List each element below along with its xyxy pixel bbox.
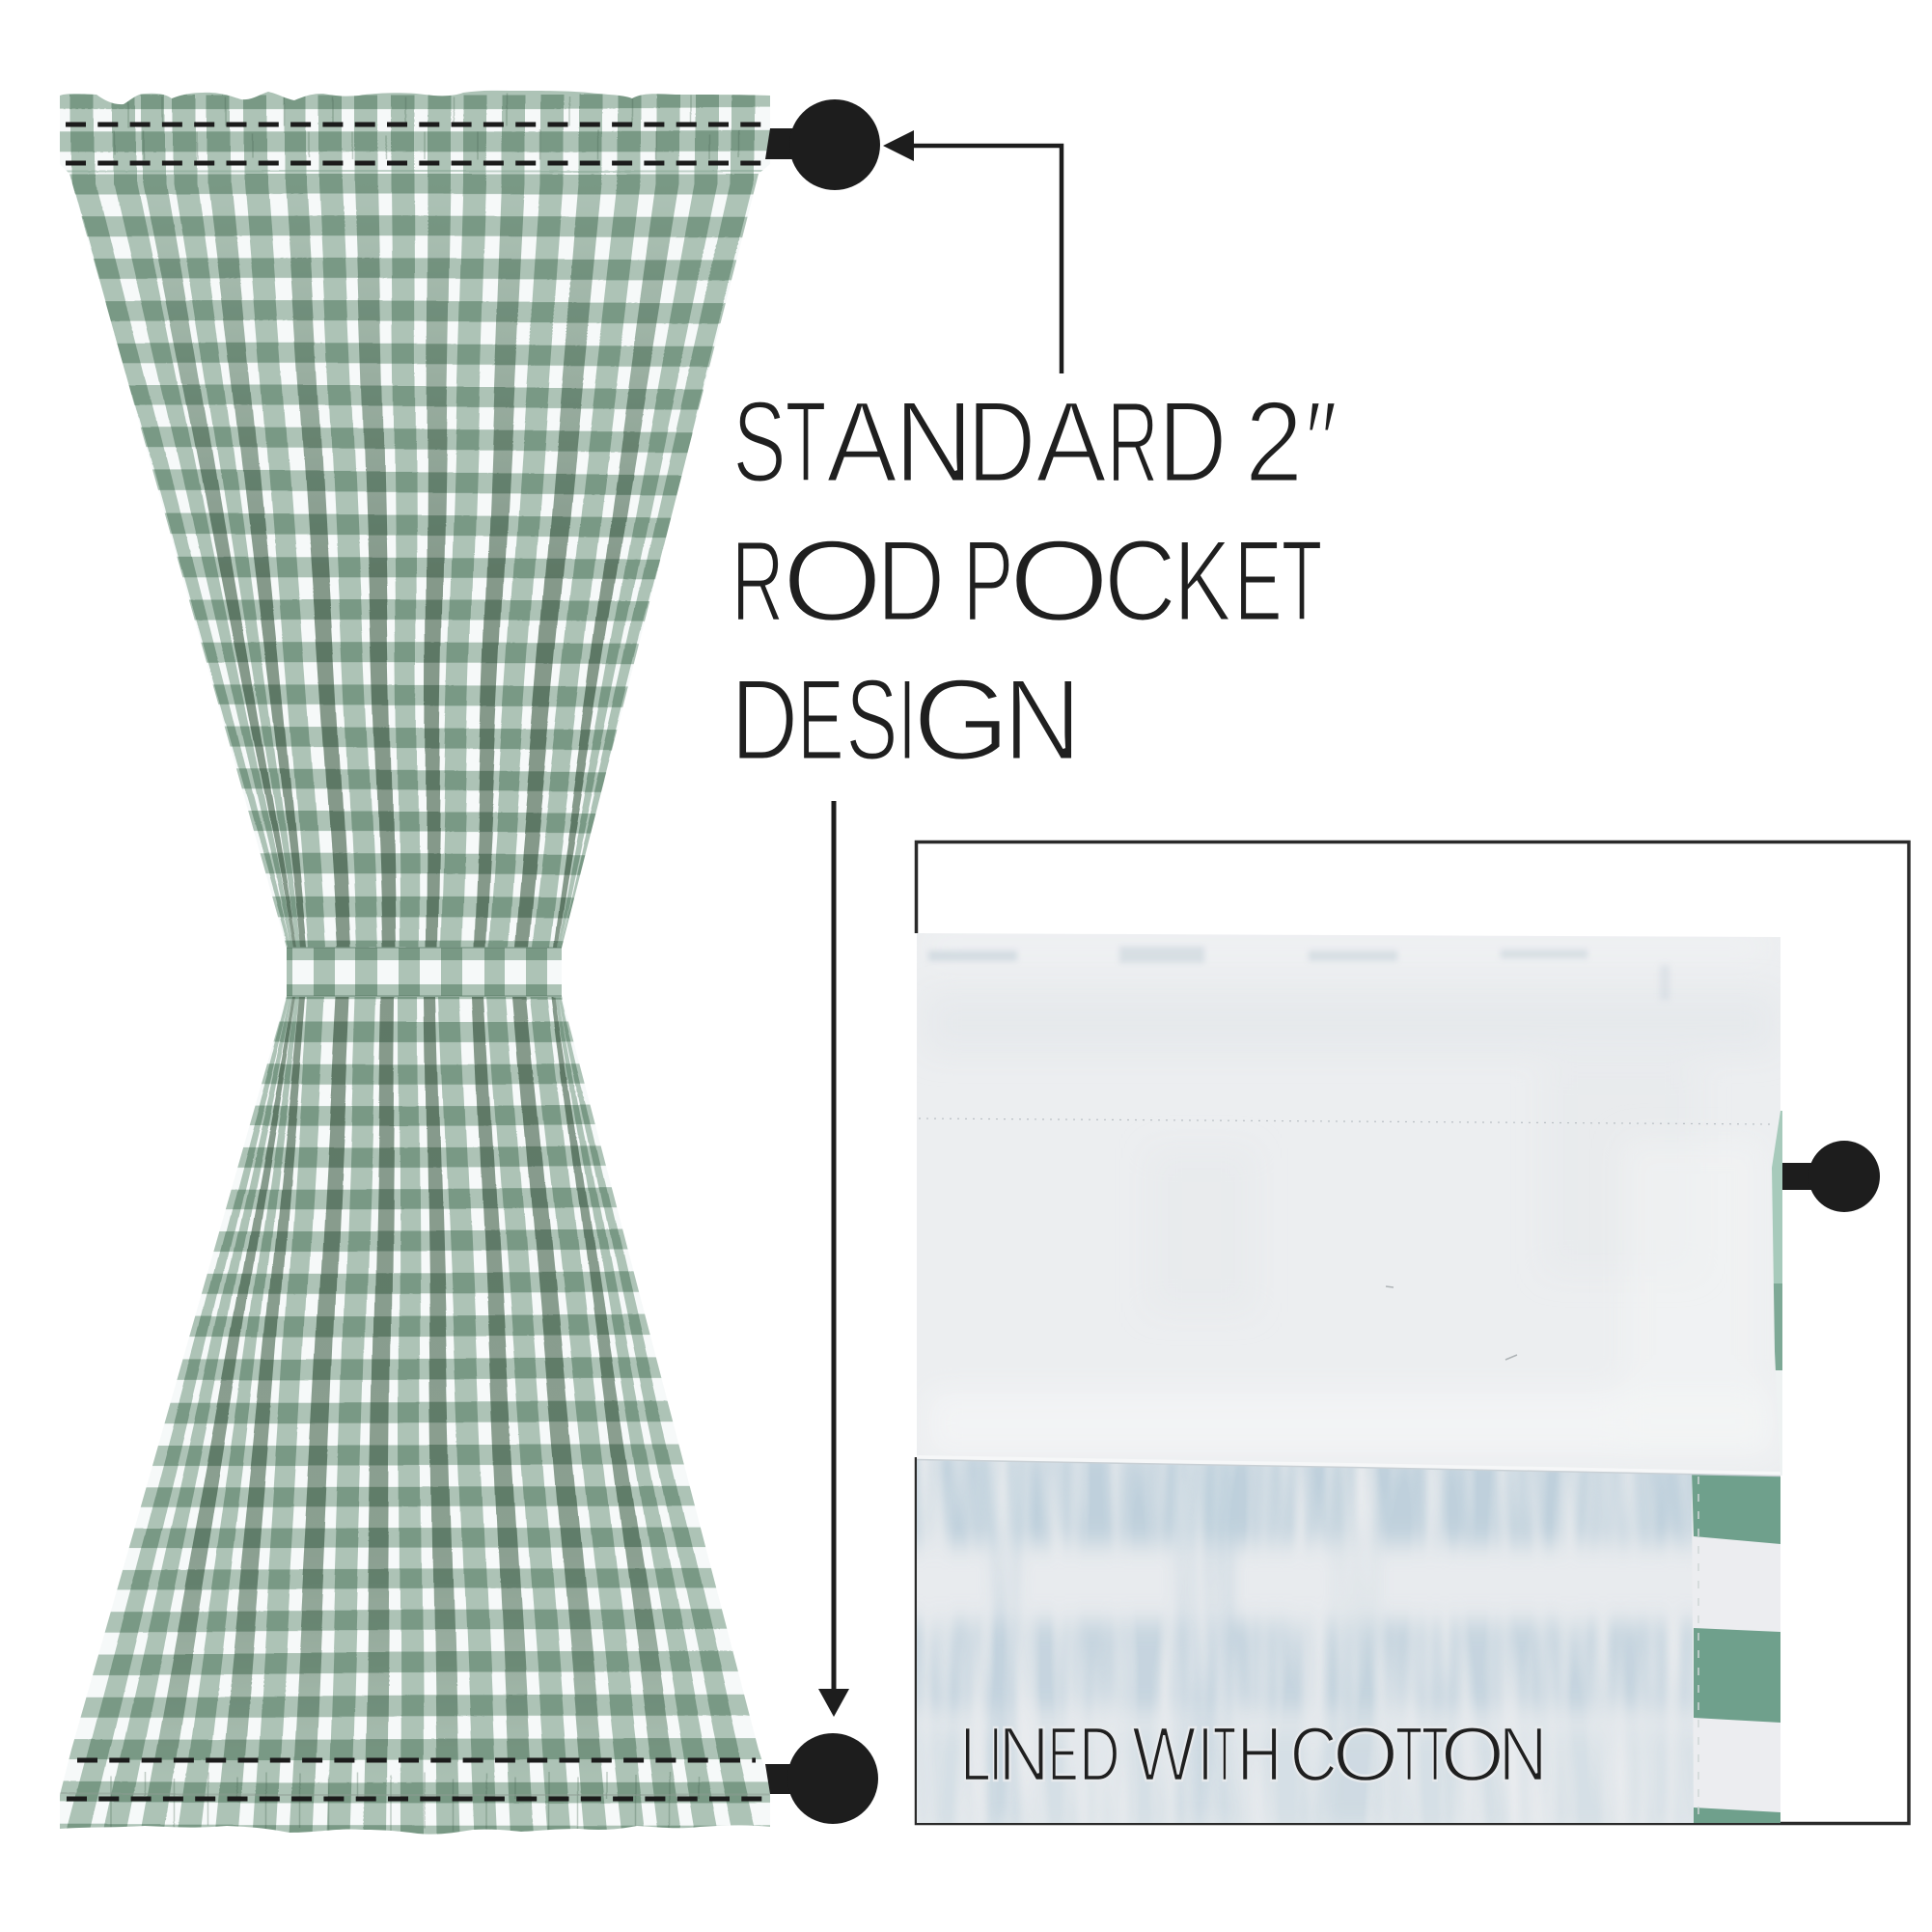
arrow: callout pointing to top rod	[883, 130, 1062, 373]
heading: standard rod pocket design	[731, 377, 1338, 785]
lining fabric lower section	[897, 1448, 1780, 1834]
label: lined with cotton: W	[1132, 1711, 1197, 1797]
label: lined with cotton: N	[998, 1711, 1050, 1797]
heading: standard rod pocket design: G	[913, 655, 1010, 785]
heading: standard rod pocket design: R	[731, 516, 785, 646]
heading: standard rod pocket design: A	[1035, 377, 1107, 507]
heading: standard rod pocket design: S	[845, 655, 898, 785]
curtain upper section above tieback	[39, 68, 791, 965]
label: lined with cotton: I	[1198, 1711, 1213, 1797]
stitch lines: top rod pocket	[66, 124, 762, 163]
heading: standard rod pocket design: E	[1234, 516, 1283, 646]
heading: standard rod pocket design: N	[894, 377, 974, 507]
label: lined with cotton: E	[1048, 1711, 1078, 1797]
heading: standard rod pocket design: P	[963, 516, 1013, 646]
icon: small curtain rod	[1782, 1141, 1880, 1212]
heading: standard rod pocket design: T	[1282, 516, 1322, 646]
heading: standard rod pocket design: C	[1104, 516, 1176, 646]
heading: standard rod pocket design: K	[1173, 516, 1231, 646]
heading: standard rod pocket design: O	[1008, 516, 1110, 646]
heading: standard rod pocket design: E	[797, 655, 844, 785]
icon: top curtain rod	[765, 99, 880, 190]
panel: lined with cotton detail	[897, 842, 1909, 1834]
heading: standard rod pocket design: D	[731, 655, 798, 785]
heading: standard rod pocket design: 2	[1245, 377, 1303, 507]
curtain panel: gingham door panel	[39, 68, 791, 1843]
label: lined with cotton: C	[1290, 1711, 1338, 1797]
label: lined with cotton: I	[989, 1711, 1002, 1797]
label: lined with cotton: D	[1079, 1711, 1120, 1797]
heading: standard rod pocket design: D	[876, 516, 945, 646]
label: lined with cotton: O	[1333, 1711, 1398, 1797]
heading: standard rod pocket design: T	[786, 377, 826, 507]
icon: bottom curtain rod	[765, 1733, 878, 1824]
label: lined with cotton: T	[1213, 1711, 1236, 1797]
heading: standard rod pocket design: I	[897, 655, 917, 785]
heading: standard rod pocket design: ″	[1305, 377, 1338, 507]
heading: standard rod pocket design: D	[967, 377, 1035, 507]
panel frame	[917, 842, 1909, 1824]
heading: standard rod pocket design: A	[826, 377, 897, 507]
stitch lines: bottom rod pocket	[67, 1760, 762, 1799]
curtain lower section below tieback	[39, 984, 791, 1843]
label: lined with cotton: H	[1237, 1711, 1282, 1797]
label: lined with cotton: T	[1421, 1711, 1449, 1797]
heading: standard rod pocket design: D	[1158, 377, 1227, 507]
label: lined with cotton: T	[1395, 1711, 1422, 1797]
heading: standard rod pocket design: O	[782, 516, 883, 646]
heading: standard rod pocket design: S	[732, 377, 787, 507]
fold seam	[917, 1459, 1780, 1477]
label: lined with cotton: O	[1441, 1711, 1504, 1797]
tieback band	[287, 948, 562, 996]
arrow: pointing down to bottom rod	[818, 801, 849, 1717]
green fabric sliver behind fold	[1770, 1111, 1782, 1476]
label: lined with cotton: L	[961, 1711, 991, 1797]
label: lined with cotton: N	[1499, 1711, 1547, 1797]
heading: standard rod pocket design: R	[1107, 377, 1159, 507]
heading: standard rod pocket design: N	[1004, 655, 1082, 785]
white fold hem	[917, 926, 1785, 1486]
